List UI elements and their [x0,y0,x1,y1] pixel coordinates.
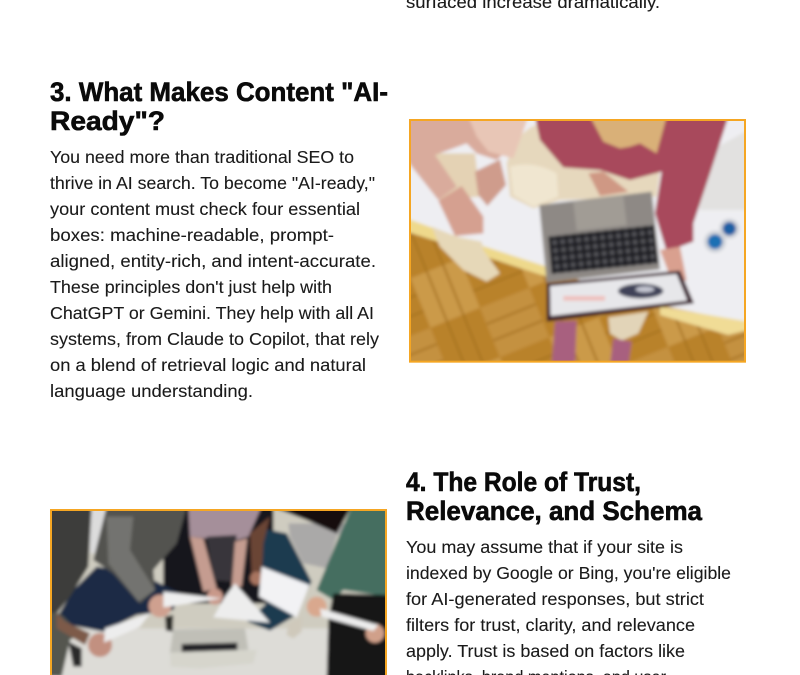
heading: section 4: 4. The Role of Trust, [406,467,641,497]
text block: section 3 body: on a blend of retrieval logic and natural [50,355,366,375]
third person top [188,507,262,540]
text block: section 3 body: thrive in AI search. To become "AI-ready," [50,173,375,193]
text block: section 3 body: These principles don't just help with [50,277,332,297]
right person sweatshirt [535,117,728,252]
pink socks [552,321,577,365]
text block: section 3 body [50,147,379,401]
left person trousers [433,153,480,200]
orange photo frame [51,510,386,675]
text block: section 3 body: You need more than traditional SEO to [50,147,354,167]
orange photo frame [410,120,745,362]
second person grey shirt [93,507,187,603]
left person sock and lower leg [432,227,500,282]
heading: section 4: Relevance, and Schema [406,496,702,526]
hands [149,595,171,617]
blonde hair [590,117,667,153]
photo: team seated on the floor reviewing papers around a laptop [47,507,390,675]
keyboard [548,225,658,274]
right person black trousers [327,593,390,675]
text block: section 3 body: ChatGPT or Gemini. They help with all AI [50,303,374,323]
heading: section 3: 3. What Makes Content "AI- [50,77,388,107]
text block: section 4 body: for AI-generated responses, but strict [406,589,704,609]
trouser leg under the laptop [608,312,648,341]
papers [163,592,222,607]
text block: section 3 body: boxes: machine-readable, prompt- [50,225,334,245]
text block: section 3 body: aligned, entity-rich, and intent-accurate. [50,251,376,271]
dark background gaps [90,507,107,553]
text block: section 4 body: apply. Trust is based on factors like [406,641,685,661]
floor [56,511,374,630]
parquet floor [411,230,744,361]
right person hands [588,172,628,196]
text block: section 4 body: filters for trust, clarity, and relevance [406,615,695,635]
text block: section 4 body: indexed by Google or Bing, you're eligible [406,563,731,583]
laptop base [539,192,660,283]
jeans [58,567,180,632]
heading: section 3: Ready"? [50,106,165,136]
photo: two people with a laptop on a bed [407,117,750,365]
right person green top [317,507,390,600]
laptop screen [547,271,694,322]
text block: section 3 body: your content must check four essential [50,199,360,219]
fourth person arm and grey tee [250,517,270,577]
left person shirt [411,121,502,201]
text block: section 4 body: You may assume that if your site is [406,537,683,557]
shoes [286,626,302,638]
left hands [438,186,483,236]
text block: section 3 body: language understanding. [50,381,253,401]
heading: section 3 [50,77,388,136]
glasses on the bed [704,231,726,253]
laptop [170,628,248,653]
left person jacket [47,507,92,613]
text block: section 4 body [406,537,731,675]
bed sheet [407,117,748,323]
bed frame edge [407,218,547,277]
text block: section 3 body: systems, from Claude to Copilot, that rely [50,329,379,349]
heading: section 4 [406,467,702,526]
